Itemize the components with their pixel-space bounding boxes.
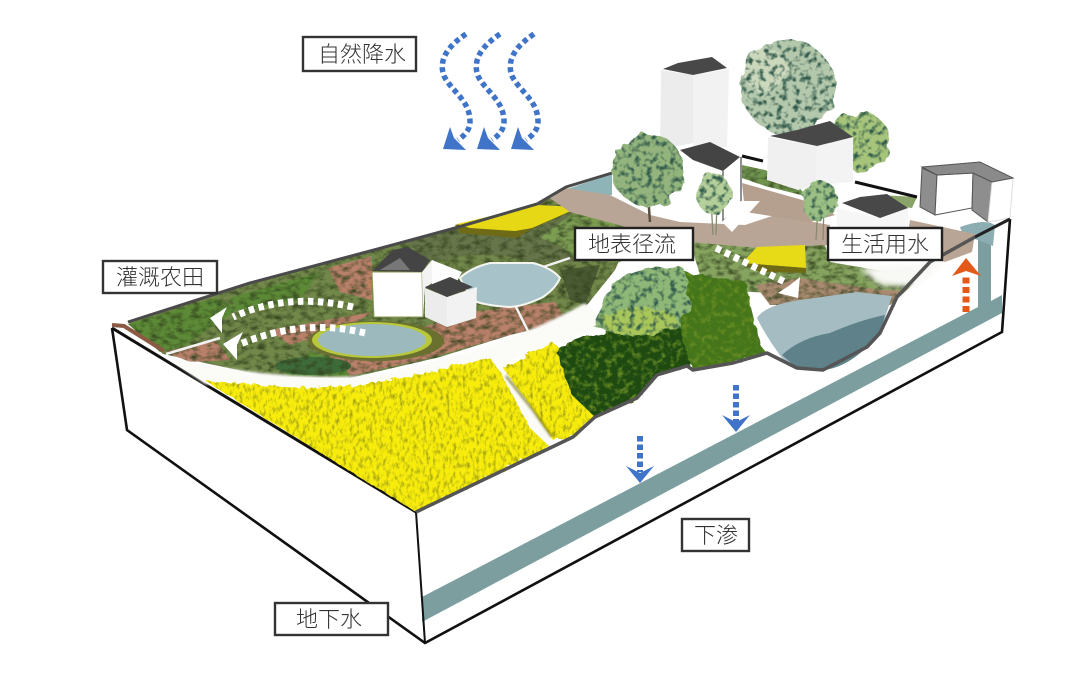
far right building (920, 162, 1013, 222)
block outline (112, 219, 1010, 643)
label: natural rainfall (303, 37, 416, 71)
label: irrigated farmland: 灌溉农田 (116, 265, 204, 290)
label: infiltration: 下渗 (694, 523, 738, 548)
arrow 2 (476, 34, 504, 150)
mid house (660, 142, 760, 232)
brown corner edge (112, 325, 164, 351)
forest dark canopy (557, 290, 700, 417)
road on left: white irrigation channel (166, 258, 570, 354)
farmland base (128, 190, 640, 378)
arrow 1 (442, 34, 470, 150)
label: groundwater: 地下水 (296, 607, 362, 632)
terrain surface: left farmland (128, 190, 655, 378)
label: natural rainfall: 自然降水 (318, 42, 406, 67)
groundwater band (422, 222, 1002, 622)
terrain back edge (128, 173, 612, 322)
label: surface runoff: 地表径流 (588, 232, 676, 257)
label: groundwater (275, 603, 388, 635)
rapeseed field (205, 342, 606, 512)
label: infiltration (682, 519, 749, 551)
arrow lower (223, 327, 365, 360)
small back pond (567, 174, 612, 195)
green slope (690, 242, 915, 305)
domestic water orange arrow (952, 258, 981, 312)
tree left of house (612, 134, 684, 222)
white path around rapeseed field (165, 303, 610, 446)
house: left large (372, 247, 462, 317)
small bamboo tree 1 (697, 173, 731, 235)
big tree behind (741, 40, 835, 134)
lower pond (308, 321, 444, 361)
infiltration arrow left (626, 436, 654, 483)
yellow patch bottom right (742, 245, 806, 273)
left pond (460, 263, 560, 307)
beige paths (548, 188, 830, 248)
big house (767, 121, 853, 190)
house: left small (425, 277, 477, 327)
irrigation arrows (210, 301, 365, 360)
right face top edge (975, 219, 1010, 237)
arrow upper (210, 301, 353, 333)
right upper ground: beige paths and greens (548, 165, 975, 305)
infiltration arrow right (722, 385, 750, 432)
label: domestic water: 生活用水 (841, 232, 929, 257)
forest right green canopy (680, 272, 767, 370)
label: irrigated farmland (103, 261, 217, 293)
green plots (128, 272, 350, 376)
rainfall arrows (442, 34, 538, 150)
arrow 3 (510, 34, 538, 150)
shrub (275, 357, 351, 375)
large right pond (757, 292, 892, 371)
forest light canopy (592, 268, 690, 336)
block faces: white soil body (112, 219, 1010, 643)
label: domestic water (828, 228, 942, 260)
tree right (830, 112, 890, 172)
label: surface runoff (575, 228, 693, 260)
terrain front edge (416, 237, 975, 512)
yellow patch top (455, 205, 580, 238)
tall building (660, 57, 729, 150)
forest (557, 268, 767, 417)
surface runoff arrow (716, 248, 800, 298)
lower right house (837, 194, 908, 228)
red soil plots (165, 256, 572, 376)
small bamboo tree 2 (802, 180, 838, 240)
black ridge lines (742, 156, 917, 197)
